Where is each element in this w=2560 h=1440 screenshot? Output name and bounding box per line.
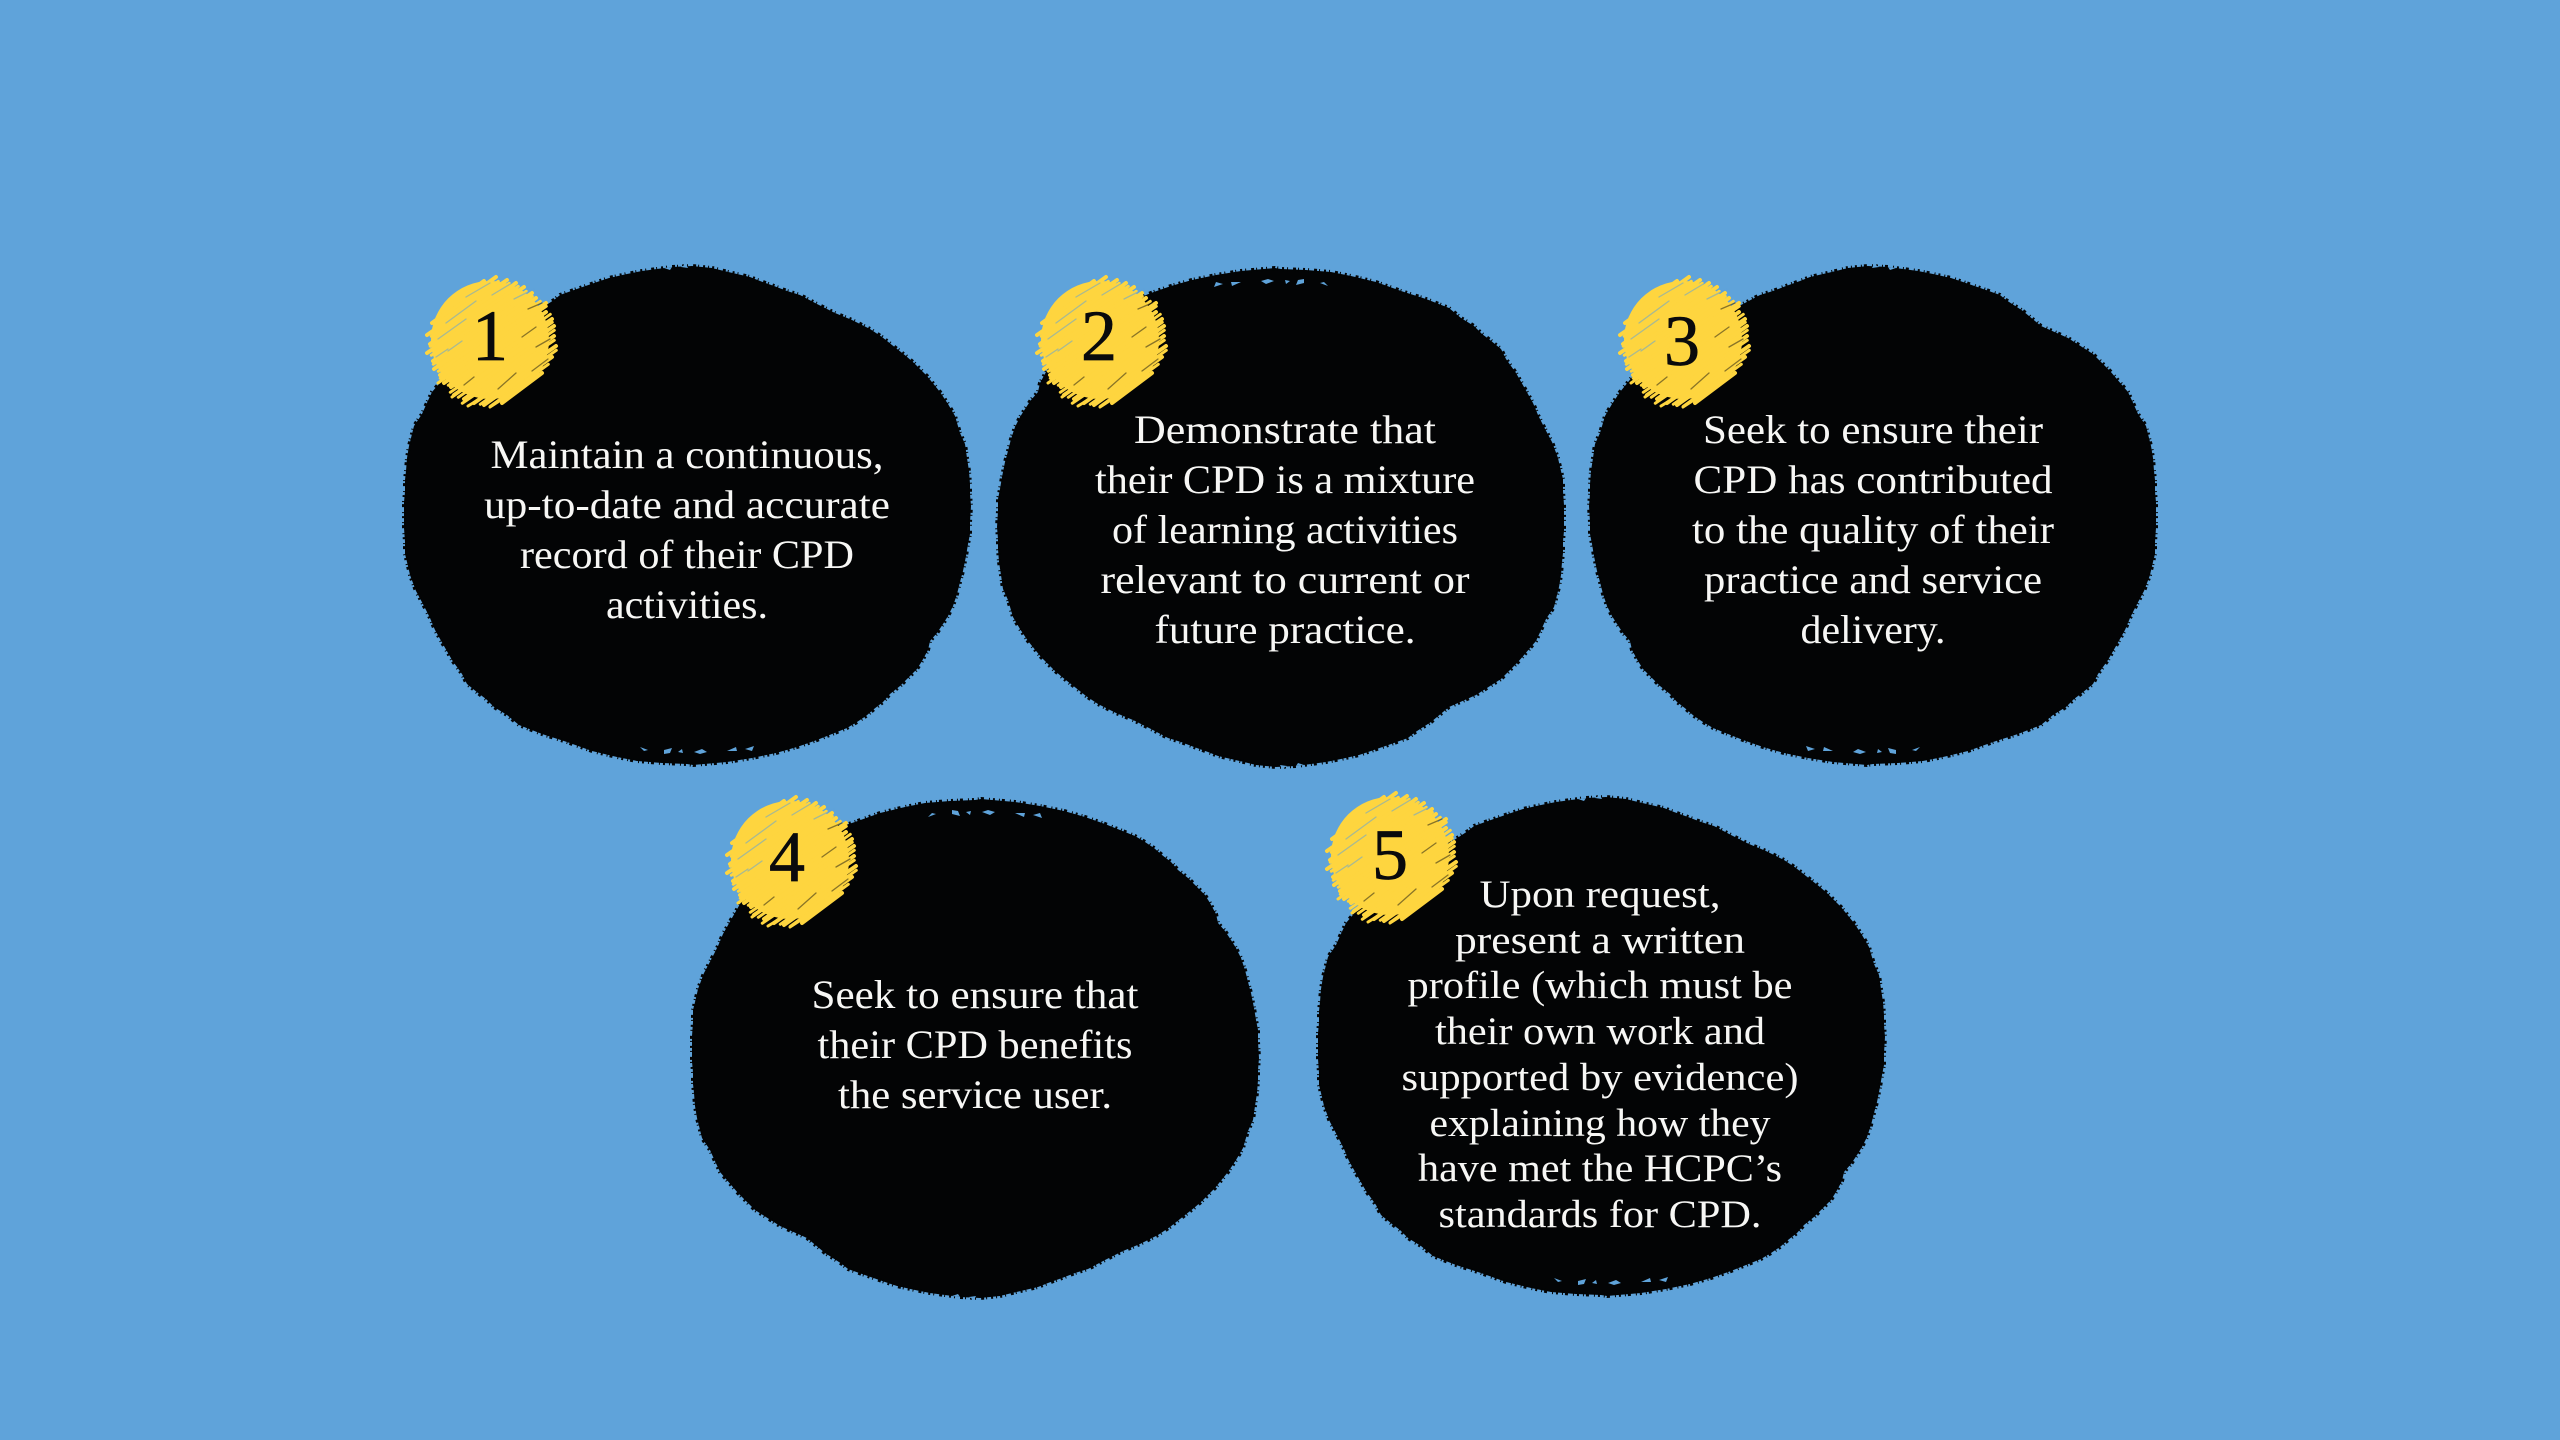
icon: yellow badge with number 1: 1 <box>472 296 508 376</box>
text: step 4 description: the service user. <box>838 1072 1112 1117</box>
text: step 2 description: their CPD is a mixture <box>1095 457 1475 502</box>
icon: yellow badge with number 5 <box>1327 793 1456 923</box>
text: step 1 description: Maintain a continuous, <box>490 432 884 477</box>
text: step 1 description <box>484 432 890 627</box>
panel: step 1 blob <box>404 264 971 765</box>
icon: yellow badge with number 5: 5 <box>1372 815 1408 895</box>
text: step 5 description: their own work and <box>1435 1010 1766 1053</box>
text: step 3 description <box>1692 407 2054 652</box>
panel: step 5 blob <box>1318 793 1885 1296</box>
panel: step 4 blob <box>692 797 1259 1300</box>
text: step 2 description: of learning activities <box>1112 507 1458 552</box>
text: step 3 description: CPD has contributed <box>1694 457 2052 502</box>
icon: yellow badge with number 3: 3 <box>1664 301 1700 381</box>
text: step 5 description <box>1402 873 1798 1236</box>
text: step 2 description <box>1095 407 1475 652</box>
text: step 2 description: future practice. <box>1154 607 1416 652</box>
text: step 5 description: supported by evidence) <box>1402 1056 1798 1099</box>
text: step 4 description: Seek to ensure that <box>812 972 1138 1017</box>
text: step 3 description: Seek to ensure their <box>1703 407 2043 452</box>
text: step 4 description: their CPD benefits <box>818 1022 1132 1067</box>
icon: yellow badge with number 4 <box>727 797 856 927</box>
panel: step 3 blob <box>1589 264 2156 765</box>
icon: yellow badge with number 2 <box>1037 277 1166 407</box>
text: step 4 description <box>812 972 1138 1117</box>
text: step 3 description: delivery. <box>1800 607 1946 652</box>
icon: yellow badge with number 2: 2 <box>1081 296 1117 376</box>
text: step 5 description: standards for CPD. <box>1438 1193 1762 1236</box>
text: step 5 description: profile (which must be <box>1408 964 1792 1007</box>
text: step 1 description: activities. <box>606 582 768 627</box>
icon: yellow badge with number 4: 4 <box>769 817 805 897</box>
text: step 3 description: to the quality of their <box>1692 507 2054 552</box>
text: step 2 description: Demonstrate that <box>1134 407 1436 452</box>
text: step 5 description: present a written <box>1455 919 1745 962</box>
text: step 5 description: Upon request, <box>1480 873 1720 916</box>
panel: step 2 blob <box>997 268 1564 769</box>
text: step 1 description: record of their CPD <box>520 532 854 577</box>
icon: yellow badge with number 3 <box>1620 277 1749 407</box>
text: step 5 description: have met the HCPC’s <box>1418 1147 1782 1190</box>
icon: yellow badge with number 1 <box>427 277 556 407</box>
text: step 5 description: explaining how they <box>1430 1102 1771 1145</box>
text: step 1 description: up-to-date and accurate <box>484 482 890 527</box>
text: step 2 description: relevant to current or <box>1100 557 1470 602</box>
text: step 3 description: practice and service <box>1704 557 2042 602</box>
